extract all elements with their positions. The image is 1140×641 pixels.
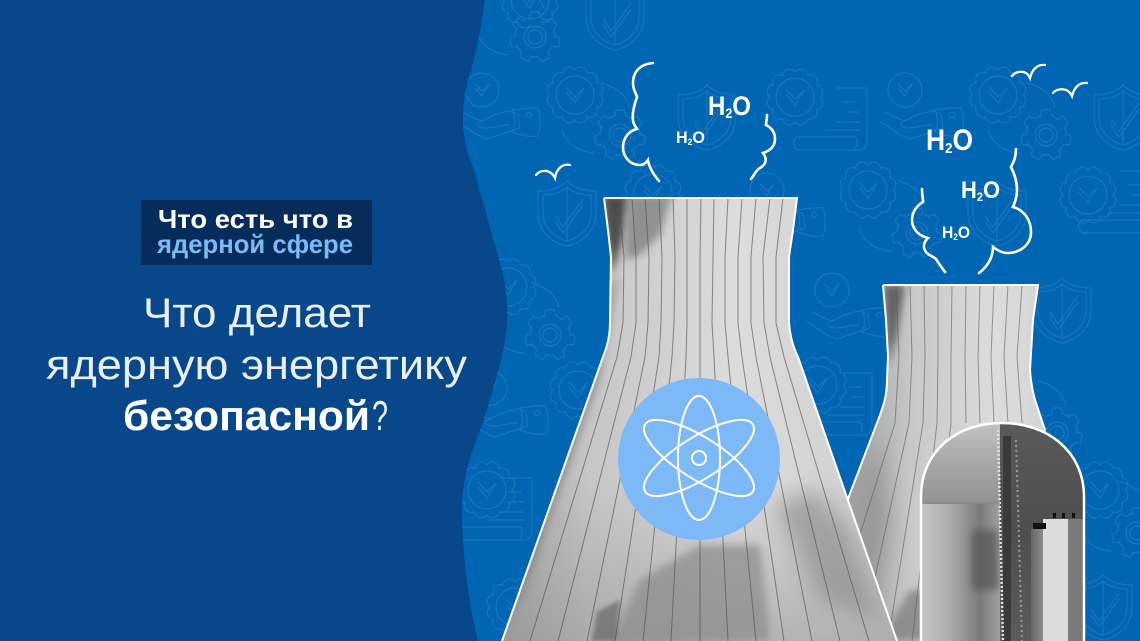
steam cloud: rear tower: [912, 149, 1031, 273]
label: H2O small, front tower: O: [692, 128, 705, 147]
label: H2O large, front tower: 2: [725, 105, 732, 121]
label: H2O large, rear tower: O: [952, 124, 973, 157]
label: H2O large, rear tower: 2: [945, 140, 952, 157]
background icon pattern: [457, 0, 1140, 640]
series badge line 2: ядерной сфере: [156, 229, 353, 259]
cooling tower: rear: [845, 285, 1060, 641]
left dark blue wave panel: [0, 0, 507, 641]
label: H2O medium, rear tower: O: [983, 177, 1000, 204]
reactor building: [920, 420, 1090, 641]
label: H2O large, front tower: H: [708, 91, 728, 121]
label: H2O small, rear tower: H: [942, 223, 954, 242]
title: ядерную энергетику: [46, 341, 467, 388]
icon: atom: [634, 396, 764, 520]
atom icon circle: [618, 378, 780, 540]
label: H2O small, front tower: 2: [688, 137, 692, 147]
icon: bird right: [1053, 83, 1087, 96]
label: H2O small, rear tower: O: [958, 223, 970, 242]
title: [46, 289, 467, 439]
label: H2O large, front tower: O: [732, 91, 751, 121]
label: H2O medium, rear tower: H: [961, 177, 978, 204]
label: H2O medium, rear tower: 2: [977, 190, 983, 204]
label: H2O small, rear tower: 2: [953, 232, 958, 242]
title: ?: [372, 392, 388, 439]
label: H2O large, rear tower: H: [926, 124, 948, 157]
title: Что делает: [143, 289, 371, 336]
cooling tower: front: [495, 195, 900, 641]
title: безопасной: [123, 392, 370, 439]
series badge line 1: Что есть что в: [158, 204, 353, 234]
steam cloud: front tower: [623, 63, 775, 181]
icon: bird left: [536, 165, 570, 178]
icon: bird upper right: [1012, 65, 1045, 78]
series badge: [141, 200, 372, 265]
label: H2O small, front tower: H: [676, 128, 688, 147]
